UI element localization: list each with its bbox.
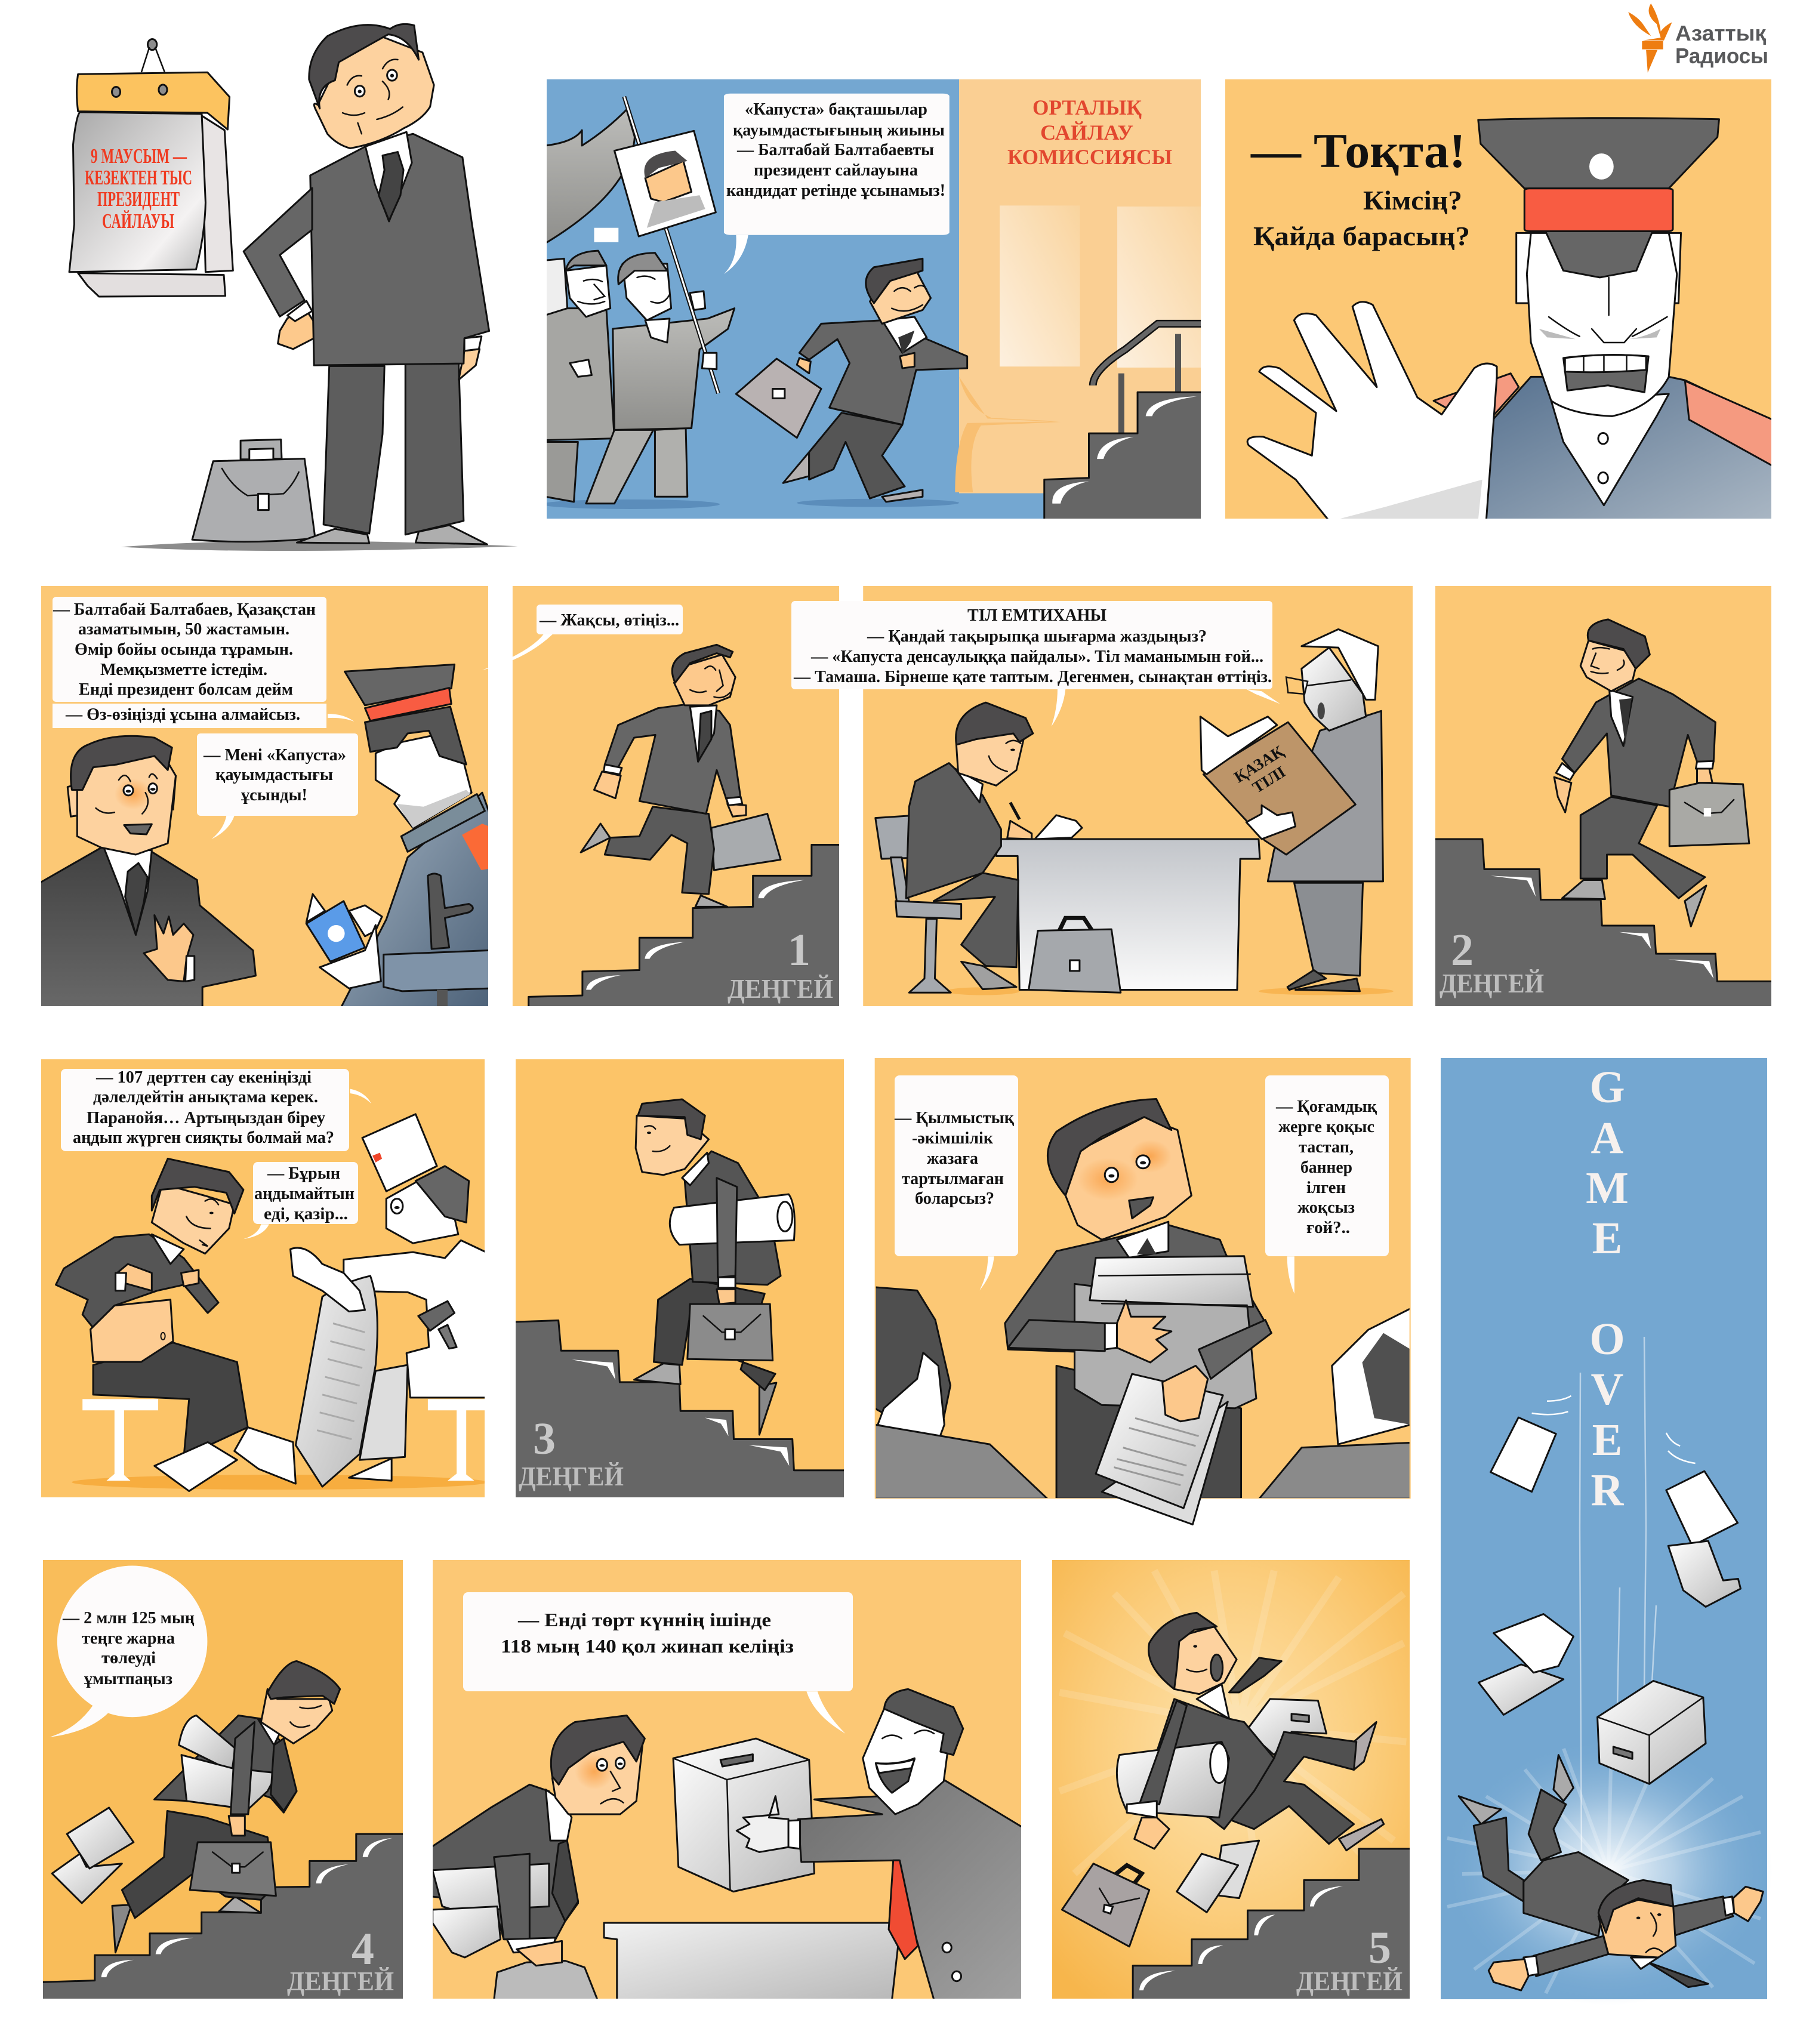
- yellow background: [514, 1058, 845, 1499]
- yellow background: [1224, 78, 1773, 520]
- candidate carrying papers: [112, 1661, 340, 1953]
- speech bubble: officer reply: — Өз-өзіңізді ұсына алмайсыз.: [65, 705, 300, 724]
- briefcase: [1029, 918, 1121, 992]
- orange sunburst background: [1051, 1559, 1411, 2000]
- speech bubble: doctor: — 107 дерттен сау екеніңізді: [95, 1068, 312, 1087]
- floor strip: [959, 493, 1043, 519]
- commission sign: КОМИССИЯСЫ: [1007, 145, 1172, 169]
- bubble tails: [1052, 689, 1280, 726]
- speech bubble: candidate introduction: — Балтабай Балтабаев, Қазақстан: [53, 600, 316, 619]
- speech bubble background: [724, 94, 950, 235]
- tired candidate: [431, 1715, 645, 2000]
- game over lettering: A: [1591, 1113, 1624, 1163]
- speech bubble: littering: тастап,: [1299, 1138, 1354, 1157]
- yellow background: [875, 1058, 1411, 1499]
- panel: language exam: [791, 585, 1414, 1007]
- commission sign: [1007, 95, 1172, 169]
- officer face: [1516, 233, 1681, 416]
- speech bubble text: «Капуста» бақташылар: [745, 100, 927, 119]
- speech bubble: candidate introduction: азаматымын, 50 жастамын.: [78, 620, 289, 639]
- speech bubble: signatures: — Енді төрт күннің ішінде: [517, 1609, 771, 1630]
- laughing official: [736, 1689, 1023, 2000]
- logo wordmark: [1675, 21, 1768, 68]
- stairs: [1133, 1849, 1411, 2000]
- calendar text: САЙЛАУЫ: [102, 209, 174, 233]
- candidate with briefcase running: [736, 258, 967, 507]
- level label 1: 1: [788, 925, 810, 975]
- scene art: [40, 1058, 488, 1499]
- game over lettering: R: [1591, 1465, 1625, 1515]
- panel: level 3 stairs: [514, 1058, 845, 1499]
- windows: [1000, 205, 1203, 368]
- crowd of supporters: [541, 228, 735, 509]
- panel: officer shouts stop: [1224, 78, 1773, 520]
- examiner with book: [1200, 629, 1383, 991]
- speech bubble: criminal record: — Қылмыстық: [894, 1109, 1015, 1127]
- speech bubble: criminal record: тартылмаған: [902, 1170, 1004, 1188]
- yellow background: [863, 585, 1414, 1007]
- yellow background: [40, 585, 489, 1007]
- calendar: [69, 39, 233, 297]
- speech bubble: nominated by Kapusta: [197, 733, 358, 816]
- game over lettering: O: [1589, 1314, 1625, 1364]
- logo: Azattyq Radiosy: [1628, 4, 1768, 73]
- speech bubble: candidate introduction: Өмір бойы осында тұрамын.: [75, 640, 293, 659]
- game over lettering: M: [1586, 1163, 1629, 1213]
- speech bubble: candidate introduction: Мемқызметте істедім.: [100, 661, 267, 679]
- officer cap: [1478, 118, 1719, 278]
- calendar text: [85, 144, 192, 233]
- candidate talking: [40, 736, 255, 1007]
- speech bubble: patient: еді, қазір...: [264, 1205, 348, 1223]
- sunburst rays: [1059, 1571, 1406, 1873]
- game over lettering: G: [1589, 1062, 1625, 1112]
- speech bubble: nominated by Kapusta: ұсынды!: [241, 786, 307, 804]
- loose papers: [1479, 1614, 1573, 1715]
- speech bubble text: — Балтабай Балтабаевты: [736, 141, 934, 159]
- table: [604, 1923, 898, 2000]
- book title: ТІЛІ: [1249, 763, 1289, 797]
- speech bubble: criminal record: -әкімшілік: [912, 1129, 994, 1148]
- level label 3: [519, 1414, 624, 1491]
- speech bubble: nominated by Kapusta: — Мені «Капуста»: [203, 746, 346, 764]
- speech bubble: littering: жоқсыз: [1297, 1198, 1355, 1217]
- speech bubble: signatures: [463, 1592, 853, 1691]
- scene art: [482, 585, 840, 1007]
- official right: [1259, 1309, 1411, 1499]
- scene art: [875, 1058, 1411, 1525]
- speech bubble: doctor: [61, 1068, 349, 1151]
- panel: level 4 fee payment: [42, 1559, 404, 2000]
- level label 2: ДЕҢГЕЙ: [1440, 968, 1544, 998]
- chair: [876, 816, 961, 992]
- panel: level 5 tumbling: [1051, 1559, 1411, 2000]
- panel: collecting documents: [875, 1058, 1411, 1525]
- briefcase: [192, 439, 315, 542]
- speech bubble text: [726, 100, 945, 200]
- scene art: [1224, 78, 1773, 520]
- man standing: [243, 24, 489, 544]
- level label 4: ДЕҢГЕЙ: [287, 1966, 394, 1996]
- game over lettering: E: [1592, 1213, 1622, 1263]
- level label 5: [1296, 1923, 1403, 1996]
- calendar text: КЕЗЕКТЕН ТЫС: [85, 166, 192, 189]
- falling streaks: [1580, 1337, 1656, 1856]
- game over lettering: [1586, 1062, 1629, 1515]
- level label 1: ДЕҢГЕЙ: [728, 973, 833, 1004]
- game over lettering: E: [1592, 1415, 1622, 1465]
- speech bubble: doctor: аңдып жүрген сияқты болмай ма?: [73, 1129, 334, 1147]
- speech bubble: officer reply: [53, 704, 326, 728]
- speech bubble: littering: жерге қоқыс: [1278, 1118, 1374, 1136]
- bubble tail: [806, 1691, 845, 1734]
- yellow background: [513, 585, 840, 1007]
- bubble tail: [482, 634, 553, 670]
- candidate holding paper pile: [1005, 1099, 1271, 1499]
- officer coat: [1434, 374, 1773, 520]
- scene art: [1051, 1559, 1411, 2000]
- speech bubble: littering: ілген: [1306, 1179, 1346, 1197]
- commission sign: САЙЛАУ: [1040, 121, 1133, 144]
- panel: supporters nominate candidate at election commission: [541, 78, 1203, 520]
- patient showing belly: [56, 1158, 248, 1457]
- scene art: [431, 1559, 1023, 2000]
- level label 5: ДЕҢГЕЙ: [1296, 1966, 1403, 1996]
- speech bubble text: президент сайлауына: [754, 161, 918, 180]
- scene art: [541, 78, 1203, 520]
- floor shadows: [946, 987, 1394, 995]
- officer shout: Қайда барасың?: [1253, 221, 1470, 251]
- candidate climbing: [581, 645, 781, 907]
- panel: document check by officer: [40, 585, 489, 1007]
- dropped papers: [52, 1808, 134, 1903]
- level label 2: 2: [1451, 925, 1474, 975]
- candidate writing: [906, 702, 1082, 989]
- blue background: [1441, 1058, 1767, 1999]
- speech bubble text: fee: ұмытпаңыз: [84, 1670, 172, 1688]
- torch icon: [1628, 4, 1672, 73]
- yellow background: [1434, 585, 1773, 1007]
- officer shout: [1250, 124, 1470, 251]
- speech bubble: patient: аңдымайтын: [254, 1185, 355, 1203]
- panel: doctor and medical certificate: [40, 1058, 488, 1499]
- speech bubble: littering: баннер: [1300, 1158, 1352, 1177]
- curled scroll: [1668, 1541, 1741, 1607]
- level label 3: 3: [533, 1414, 556, 1464]
- scene art: [40, 585, 489, 1007]
- ground shadow: [121, 541, 517, 551]
- speech bubble: littering: — Қоғамдық: [1275, 1097, 1377, 1116]
- level label 1: [728, 925, 833, 1004]
- papers in hand, overflowing the panel: [1096, 1365, 1228, 1525]
- officer with passport: [306, 664, 489, 1007]
- yellow background: [431, 1559, 1023, 2000]
- falling man: [1459, 1755, 1763, 1990]
- commission wall: [959, 78, 1203, 520]
- falling upper papers: [1491, 1396, 1738, 1546]
- stairs: [529, 844, 840, 1007]
- speech bubble: language exam: — Тамаша. Бірнеше қате таптым. Дегенмен, сынақтан өттіңіз.: [793, 668, 1272, 686]
- banner: [545, 110, 634, 243]
- panel: level 1 stairs: [482, 585, 840, 1007]
- panel: level 2 stairs: [1434, 585, 1773, 1007]
- speech bubble text: қауымдастығының жиыны: [733, 121, 945, 140]
- raised white glove: [1247, 302, 1497, 520]
- speech bubble text: fee: [62, 1609, 195, 1688]
- officer shout: Кімсің?: [1363, 185, 1462, 215]
- speech bubble: patient: — Бұрын: [267, 1164, 340, 1183]
- bubble tail: [724, 235, 748, 274]
- stairs: [42, 1834, 404, 2000]
- stairs: [514, 1321, 845, 1499]
- commission sign: ОРТАЛЫҚ: [1032, 95, 1142, 119]
- scene art: [42, 1559, 404, 2000]
- stools: [82, 1399, 486, 1481]
- speech bubble: patient: [253, 1162, 358, 1224]
- bubble tails: [979, 1256, 1294, 1294]
- level label 3: ДЕҢГЕЙ: [519, 1461, 624, 1491]
- blue background: [545, 78, 959, 520]
- speech bubble: language exam: — Қандай тақырыпқа шығарма жаздыңыз?: [867, 627, 1207, 646]
- speech bubble: doctor: дәлелдейтін анықтама керек.: [93, 1088, 318, 1106]
- speech bubble: doctor: Паранойя… Артыңыздан біреу: [87, 1109, 325, 1127]
- speech bubble: come through: — Жақсы, өтіңіз...: [539, 611, 679, 630]
- level label 5: 5: [1368, 1923, 1391, 1973]
- speech bubble: candidate introduction: Енді президент болсам дейм: [79, 680, 293, 699]
- speech bubble text: кандидат ретінде ұсынамыз!: [726, 181, 945, 200]
- ballot box: [1598, 1681, 1706, 1784]
- falling lower objects and man: [1459, 1541, 1763, 1990]
- stairs: [1434, 839, 1773, 1007]
- official left: [875, 1287, 1047, 1499]
- scene art: [1434, 585, 1773, 1007]
- level label 4: [287, 1924, 394, 1996]
- book title: ҚАЗАҚ: [1231, 742, 1287, 786]
- speech bubble: criminal record: жазаға: [927, 1149, 978, 1168]
- level label 4: 4: [352, 1924, 374, 1974]
- scene art: [514, 1058, 845, 1499]
- speech bubble text: fee: төлеуді: [101, 1649, 156, 1667]
- panel: candidate standing beside calendar: [69, 24, 517, 551]
- long certificate scroll: [155, 1248, 377, 1491]
- logo wordmark: Радиосы: [1675, 44, 1768, 68]
- speech bubble: littering: [1265, 1075, 1389, 1256]
- speech bubble: language exam: ТІЛ ЕМТИХАНЫ: [967, 606, 1106, 625]
- bubble tails: [211, 714, 355, 839]
- placard with portrait: [570, 97, 718, 393]
- speech bubble text: fee: — 2 млн 125 мың: [62, 1609, 195, 1627]
- calendar text: 9 МАУСЫМ —: [91, 144, 187, 168]
- speech bubble: signatures: 118 мың 140 қол жинап келіңіз: [501, 1635, 794, 1657]
- desk: [996, 839, 1260, 990]
- candidate with scroll: [634, 1099, 795, 1435]
- tumbling candidate: [1117, 1613, 1384, 1851]
- oval speech bubble: [50, 1565, 207, 1737]
- speech bubble: come through: [537, 605, 683, 634]
- speech bubble text: fee: теңге жарна: [82, 1629, 175, 1648]
- speech bubble: language exam: — «Капуста денсаулыққа пайдалы». Тіл маманымын ғой...: [810, 648, 1263, 666]
- speech bubble: language exam: [791, 601, 1272, 689]
- calendar text: ПРЕЗИДЕНТ: [97, 187, 180, 211]
- speech bubble: littering: ғой?..: [1306, 1219, 1350, 1237]
- doctor: [344, 1114, 486, 1481]
- bubble tails: [243, 1089, 371, 1239]
- wall shadow: [955, 377, 1061, 492]
- speech bubble: criminal record: [894, 1075, 1018, 1256]
- panel: collect 118140 signatures: [431, 1559, 1023, 2000]
- stairs with rail: [1044, 323, 1203, 520]
- logo wordmark: Азаттық: [1675, 21, 1767, 45]
- scene art: [863, 585, 1414, 1007]
- ballot box: [673, 1738, 814, 1892]
- level label 2: [1440, 925, 1544, 998]
- game over lettering: V: [1591, 1364, 1624, 1414]
- speech bubble: candidate introduction: [53, 597, 326, 702]
- impact burst: [1444, 1737, 1773, 2005]
- candidate climbing: [1554, 619, 1749, 926]
- figure group: [69, 24, 517, 551]
- dropped papers: [1177, 1840, 1259, 1912]
- speech bubble: nominated by Kapusta: қауымдастығы: [215, 766, 333, 784]
- dropped briefcase: [1062, 1864, 1149, 1947]
- panel: game over fall: [1441, 1058, 1773, 2005]
- floor shadow: [72, 1475, 488, 1490]
- officer shout: — Тоқта!: [1250, 124, 1466, 178]
- speech bubble: criminal record: боларсыз?: [915, 1189, 994, 1208]
- yellow background: [42, 1559, 404, 2000]
- yellow background: [40, 1058, 486, 1499]
